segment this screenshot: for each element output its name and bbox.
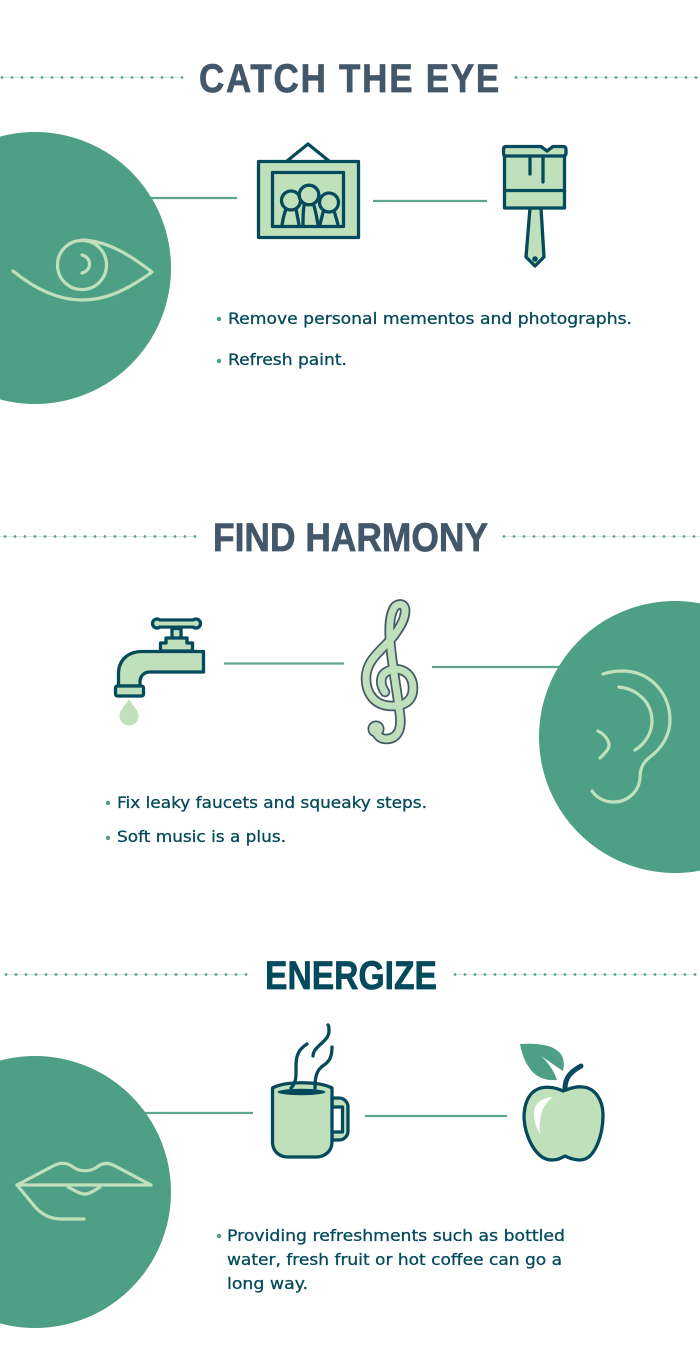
circle with lips icon — [0, 1056, 171, 1328]
bullet list: find harmony — [106, 793, 427, 846]
connector: clef to ear — [432, 666, 560, 668]
circle with eye icon — [0, 132, 171, 404]
circle with ear icon — [539, 601, 700, 873]
icon: framed family picture — [258, 144, 358, 238]
connector: mug to apple — [365, 1115, 507, 1117]
icon: steaming mug — [272, 1025, 348, 1157]
bullet list: energize: Providing refreshments such as bottled — [227, 1226, 565, 1245]
connector: faucet to clef — [224, 662, 344, 665]
icon: paint brush — [504, 146, 566, 266]
icon: apple — [520, 1044, 603, 1160]
icon: leaky faucet — [116, 619, 204, 726]
title: Catch the Eye: CATCH THE EYE — [199, 57, 501, 101]
bullet list: energize: water, fresh fruit or hot coffee can go a — [227, 1250, 562, 1269]
bullet list: catch the eye — [217, 309, 632, 369]
title: Energize: ENERGIZE — [265, 954, 437, 998]
bullet list: energize — [217, 1226, 565, 1293]
bullet list: catch the eye: Remove personal mementos and photographs. — [228, 309, 632, 328]
connector: eye to picture — [140, 197, 237, 199]
connector: lips to mug — [140, 1112, 253, 1114]
bullet list: energize: long way. — [227, 1274, 308, 1293]
icon: treble clef — [366, 604, 413, 739]
bullet list: find harmony: Fix leaky faucets and squeaky steps. — [117, 793, 427, 812]
title: Find Harmony: FIND HARMONY — [213, 516, 488, 560]
bullet list: catch the eye: Refresh paint. — [228, 350, 347, 369]
bullet list: find harmony: Soft music is a plus. — [117, 827, 286, 846]
connector: picture to brush — [373, 200, 487, 202]
